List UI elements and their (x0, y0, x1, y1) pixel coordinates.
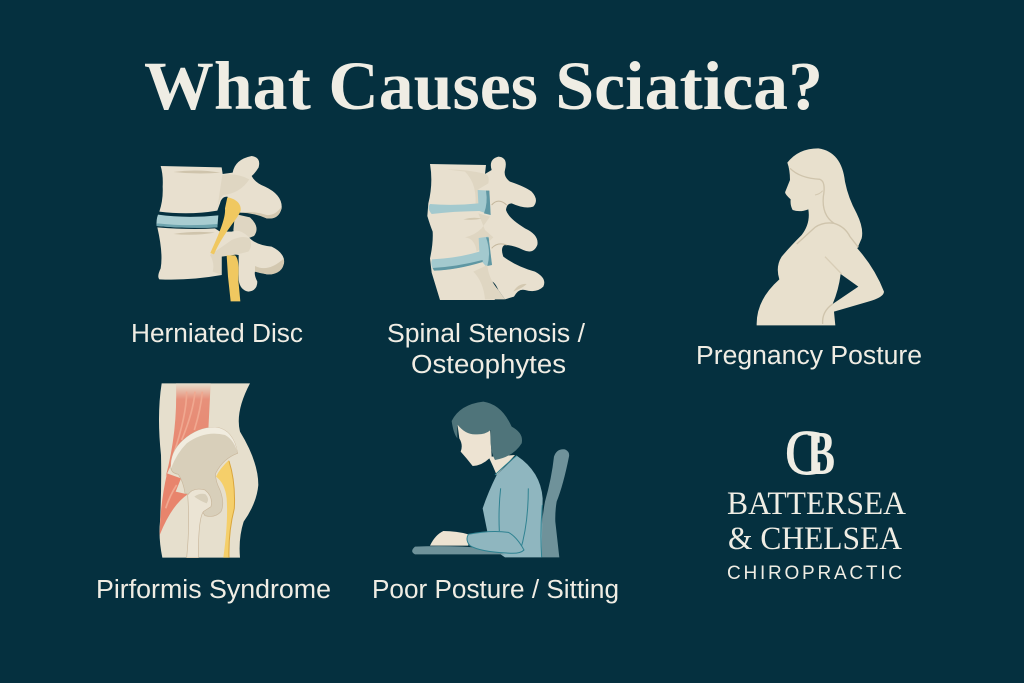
label: spinal stenosis: Osteophytes (411, 351, 566, 379)
upper vertebra (159, 156, 282, 219)
hand (430, 531, 468, 546)
icon: pregnant silhouette (757, 148, 884, 325)
chair back (541, 449, 569, 557)
forearm (467, 532, 524, 553)
title: What Causes Sciatica? (144, 48, 823, 124)
desk (412, 546, 505, 554)
icon: hip and piriformis (159, 383, 258, 558)
torso (483, 456, 543, 557)
icon: spinal stenosis vertebrae (427, 157, 544, 300)
logo: wordmark (727, 486, 906, 584)
logo: wordmark: BATTERSEA (727, 486, 906, 522)
hair (452, 402, 522, 460)
label: pregnancy posture: Pregnancy Posture (696, 342, 922, 370)
logo: monogram: B (807, 420, 835, 488)
face and neck (457, 423, 515, 475)
icon: person sitting at desk (412, 402, 569, 557)
label: spinal stenosis (387, 320, 586, 379)
label: poor posture: Poor Posture / Sitting (372, 576, 619, 604)
nerve lower (227, 255, 240, 301)
icon: herniated disc vertebrae (156, 156, 284, 301)
disc (156, 215, 218, 228)
label: herniated disc: Herniated Disc (131, 320, 303, 348)
logo: wordmark: CHIROPRACTIC (727, 563, 902, 584)
logo: monogram: C (785, 417, 823, 488)
middle facet (233, 214, 257, 239)
label: piriformis syndrome: Pirformis Syndrome (96, 576, 331, 604)
label: spinal stenosis: Spinal Stenosis / (387, 320, 586, 348)
lower vertebra (157, 227, 284, 292)
logo: wordmark: & CHELSEA (728, 521, 902, 557)
nerve upper (210, 197, 241, 254)
discs (429, 190, 491, 215)
